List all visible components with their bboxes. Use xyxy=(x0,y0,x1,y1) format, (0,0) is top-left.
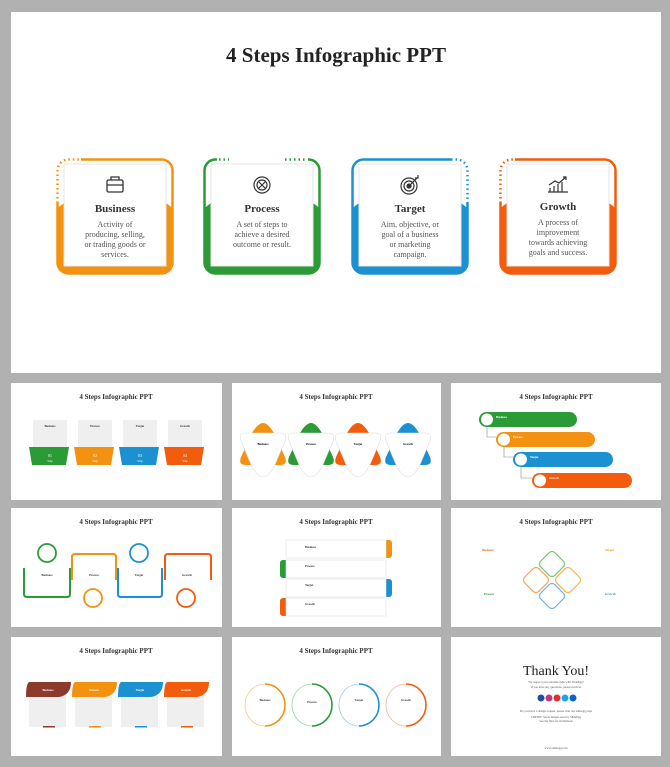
thumbnail 1: step boxes: 4 Steps Infographic PPT xyxy=(79,393,153,401)
thumbnail 1: step boxes: Step xyxy=(137,459,143,463)
thumbnail 6: diamond cluster: 4 Steps Infographic PPT xyxy=(519,518,593,526)
thumbnail 1: step boxes: Target xyxy=(136,424,144,428)
thumbnail 1: step boxes: 02 xyxy=(93,453,97,458)
thumbnail 1: step boxes: 04 xyxy=(183,453,187,458)
thumbnail 7: leaf headers: Target xyxy=(136,688,144,692)
thumbnail 1: step boxes: Step xyxy=(92,459,98,463)
thumbnail 2: blobs: Growth xyxy=(403,442,413,446)
thumbnail 3: pills: Growth xyxy=(549,476,559,480)
card: growth: improvement xyxy=(537,228,580,237)
thumbnail 4: alternating frames: Growth xyxy=(182,573,192,577)
thumbnail 8: arc circles: Process xyxy=(307,700,318,704)
thumbnail 2: blobs: Target xyxy=(354,442,362,446)
card: target: campaign. xyxy=(393,250,427,259)
thumbnail 8: arc circles: 4 Steps Infographic PPT xyxy=(299,647,373,655)
thumbnail 1: step boxes: 01 xyxy=(48,453,52,458)
card: process: achieve a desired xyxy=(234,230,290,239)
card: business: services. xyxy=(101,250,129,259)
card: target xyxy=(351,158,469,275)
card: growth: towards achieving xyxy=(529,238,587,247)
thumbnail 1: step boxes: Step xyxy=(182,459,188,463)
thumbnail 9: thank you: www.slideegg.com xyxy=(545,746,568,750)
card: target: Aim, objective, or xyxy=(381,220,439,229)
card: business xyxy=(56,158,174,275)
thumbnail 2: blobs: Business xyxy=(257,442,269,446)
card: growth xyxy=(499,158,617,275)
thumbnail 1: step boxes: Process xyxy=(90,424,101,428)
thumbnail 3: pills: Target xyxy=(530,455,538,459)
thumbnail 2: blobs xyxy=(232,383,441,500)
card: process: Process xyxy=(244,203,280,215)
thumbnail 9: thank you: Thank You! xyxy=(523,664,589,679)
card: business: producing, selling, xyxy=(85,230,145,239)
thumbnail 9: thank you: If you have any questions, please reach us xyxy=(531,685,582,690)
card: growth: goals and success. xyxy=(529,248,587,257)
thumbnail 1: step boxes: Growth xyxy=(180,424,190,428)
thumbnail 1: step boxes xyxy=(11,383,222,500)
thumbnail 8: arc circles: Target xyxy=(355,698,363,702)
main slide xyxy=(11,12,661,373)
thumbnail 8: arc circles xyxy=(232,637,441,756)
thumbnail 4: alternating frames: 4 Steps Infographic PPT xyxy=(79,518,153,526)
thumbnail 5: list rows: Business xyxy=(305,545,317,549)
card: growth: A process of xyxy=(538,218,578,227)
thumbnail 5: list rows: Process xyxy=(305,564,315,568)
thumbnail 9: thank you: Do you have a design request, please visit our slideegg page xyxy=(520,709,593,714)
thumbnail 5: list rows: 4 Steps Infographic PPT xyxy=(299,518,373,526)
thumbnail 7: leaf headers: 4 Steps Infographic PPT xyxy=(79,647,153,655)
thumbnail 5: list rows xyxy=(232,508,441,627)
thumbnail 4: alternating frames: Process xyxy=(89,573,100,577)
card: business: or trading goods or xyxy=(84,240,146,249)
thumbnail 3: pills: Process xyxy=(513,435,523,439)
thumbnail 3: pills: 4 Steps Infographic PPT xyxy=(519,393,593,401)
thumbnail 7: leaf headers: Process xyxy=(89,688,100,692)
thumbnail 9: thank you: We respect your valuable time with SlideEgg! xyxy=(528,680,584,684)
thumbnail 3: pills xyxy=(451,383,661,500)
thumbnail 9: thank you xyxy=(451,637,661,756)
thumbnail 6: diamond cluster: Growth xyxy=(605,592,616,596)
thumbnail 9: thank you: CREDIT: Stock images used by SlideEgg xyxy=(531,715,582,719)
thumbnail 6: diamond cluster: Business xyxy=(482,548,495,552)
card: target: or marketing xyxy=(389,240,431,249)
card: process xyxy=(203,158,321,275)
thumbnail 7: leaf headers: Business xyxy=(42,688,54,692)
title: 4 Steps Infographic PPT xyxy=(226,43,446,67)
thumbnail 1: step boxes: 03 xyxy=(138,453,142,458)
card: process: A set of steps to xyxy=(236,220,288,229)
thumbnail 4: alternating frames: Business xyxy=(41,573,53,577)
thumbnail 8: arc circles: Business xyxy=(259,698,271,702)
thumbnail 5: list rows: Target xyxy=(305,583,313,587)
thumbnail 2: blobs: 4 Steps Infographic PPT xyxy=(299,393,373,401)
thumbnail 2: blobs: Process xyxy=(306,442,317,446)
thumbnail 6: diamond cluster: Process xyxy=(484,592,495,596)
thumbnail 7: leaf headers xyxy=(11,637,222,756)
card: business: Activity of xyxy=(98,220,133,229)
thumbnail 4: alternating frames xyxy=(11,508,222,627)
thumbnail 9: thank you: See the files for attributions xyxy=(539,719,573,723)
thumbnail 6: diamond cluster: Target xyxy=(605,548,615,552)
card: business: Business xyxy=(95,203,136,215)
thumbnail 1: step boxes: Step xyxy=(47,459,53,463)
thumbnail 7: leaf headers: Growth xyxy=(181,688,191,692)
card: target: goal of a business xyxy=(381,230,439,239)
thumbnail 6: diamond cluster xyxy=(451,508,661,627)
thumbnail 5: list rows: Growth xyxy=(305,602,315,606)
thumbnail 1: step boxes: Business xyxy=(44,424,56,428)
card: process: outcome or result. xyxy=(233,240,291,249)
thumbnail 3: pills: Business xyxy=(496,415,508,419)
card: growth: Growth xyxy=(540,201,576,213)
thumbnail 8: arc circles: Growth xyxy=(401,698,411,702)
card: target: Target xyxy=(395,203,426,215)
thumbnail 4: alternating frames: Target xyxy=(135,573,143,577)
